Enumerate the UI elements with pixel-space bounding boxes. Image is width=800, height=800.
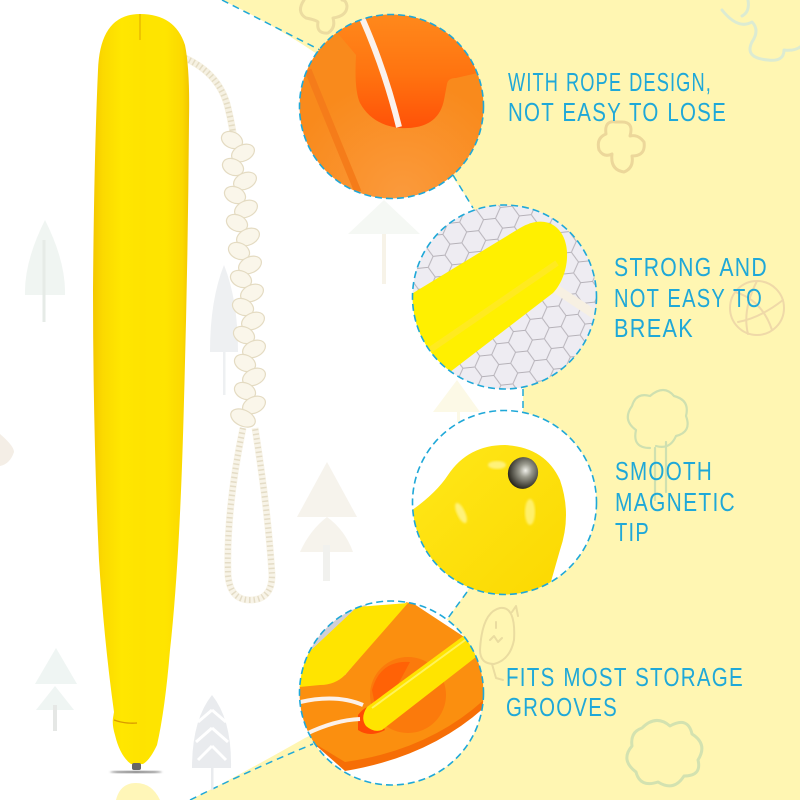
rope: top strand <box>185 58 234 140</box>
pen seam <box>139 14 141 40</box>
text: rope design <box>508 67 727 127</box>
tree 3 <box>210 265 238 395</box>
ropes <box>296 698 363 734</box>
tree 5 <box>35 648 77 731</box>
yellow pen <box>363 636 476 731</box>
callout 2: strength detail <box>405 203 600 393</box>
main product: yellow pen with rope <box>93 14 272 800</box>
background doodles on yellow <box>300 0 800 786</box>
pen tip notch <box>114 720 137 723</box>
tree 2 <box>348 200 420 284</box>
callout 3: magnetic tip detail <box>412 410 598 596</box>
text: rope design: WITH ROPE DESIGN, <box>508 67 712 97</box>
steel ball <box>508 457 538 489</box>
callout 1: rope detail <box>298 14 484 200</box>
doodle: cloud bottom right <box>627 720 702 786</box>
text: strong: BREAK <box>614 313 694 343</box>
rope: loop <box>228 428 272 600</box>
reflection <box>116 783 160 800</box>
metal tip <box>132 763 141 770</box>
text: storage grooves <box>506 662 744 722</box>
text: magnetic tip: SMOOTH <box>615 456 713 486</box>
tip shadow <box>110 771 162 773</box>
text: rope design: NOT EASY TO LOSE <box>508 97 727 127</box>
photo: tip <box>413 413 596 594</box>
pen body <box>93 14 189 764</box>
white area <box>0 0 523 800</box>
text: storage grooves: FITS MOST STORAGE <box>506 662 744 692</box>
dashed ring <box>300 14 484 198</box>
yellow tablet frame <box>290 603 408 688</box>
doodle: bird <box>480 606 518 680</box>
dashed ring <box>412 205 596 389</box>
doodle: tree outline <box>628 390 688 500</box>
round recess <box>370 657 446 733</box>
leaf <box>0 434 14 466</box>
rope: braid <box>219 128 268 431</box>
moulded ridge <box>308 70 358 192</box>
dashed ring <box>300 601 484 785</box>
tree 7 <box>433 380 480 422</box>
text: strong: STRONG AND <box>614 252 768 282</box>
text: storage grooves: GROOVES <box>506 692 618 722</box>
tree 4 <box>297 462 357 581</box>
text: magnetic tip: TIP <box>615 517 650 547</box>
tree 6 <box>192 695 231 790</box>
dashed ring <box>412 410 596 594</box>
tree 1 <box>25 220 65 322</box>
doodle: flower top <box>300 0 347 33</box>
photo: pen on honeycomb <box>405 203 600 393</box>
text: magnetic tip: MAGNETIC <box>615 487 736 517</box>
doodle: cloud top right <box>722 0 800 60</box>
white panel with dashed boundary <box>0 0 523 800</box>
photo: orange groove <box>300 14 484 198</box>
text: magnetic tip <box>615 456 736 547</box>
doodle: ball <box>730 281 784 335</box>
photo: pen in groove <box>300 602 484 785</box>
callout 4: storage groove detail <box>290 598 490 788</box>
doodle: flower middle <box>598 122 644 172</box>
text: strong <box>614 252 768 343</box>
rope strand <box>362 18 399 127</box>
pale trees on white <box>0 200 480 790</box>
